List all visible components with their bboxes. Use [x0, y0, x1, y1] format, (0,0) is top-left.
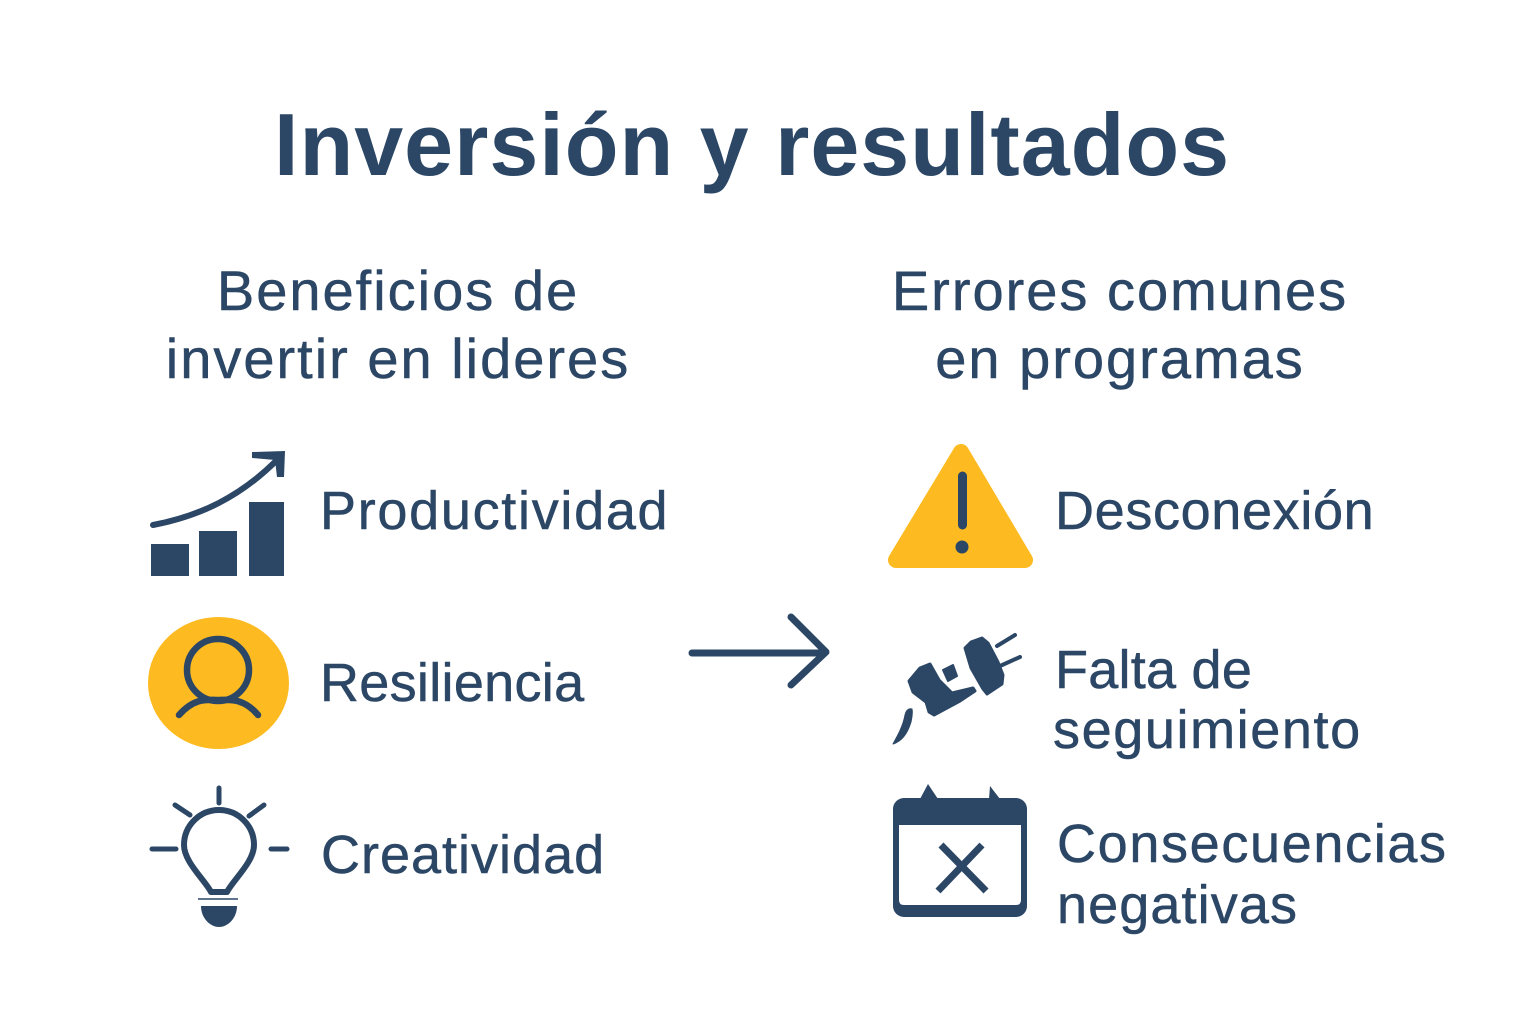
heading: errores: en programas — [935, 327, 1305, 390]
heading: errores: Errores comunes — [892, 259, 1348, 322]
icon: warning triangle — [896, 452, 1025, 560]
label: falta de seguimiento: seguimiento — [1053, 700, 1362, 760]
label: resiliencia: Resiliencia — [320, 653, 584, 713]
icon: person in yellow circle — [148, 617, 289, 749]
icon: light bulb — [152, 788, 287, 927]
label: consecuencias negativas — [1057, 814, 1448, 935]
label: consecuencias negativas: negativas — [1057, 875, 1298, 935]
label: consecuencias negativas: Consecuencias — [1057, 814, 1448, 874]
heading: beneficios — [166, 259, 630, 390]
title: Inversión y resultados — [274, 95, 1230, 194]
label: productividad: Productividad — [320, 481, 669, 541]
icon: growth chart — [151, 451, 285, 576]
arrow — [692, 617, 826, 685]
label: falta de seguimiento — [1053, 640, 1362, 760]
heading: beneficios: Beneficios de — [217, 259, 579, 322]
label: desconexion: Desconexión — [1055, 481, 1374, 541]
icon: unplugged plug — [893, 635, 1020, 744]
label: falta de seguimiento: Falta de — [1055, 640, 1252, 700]
heading: beneficios: invertir en lideres — [166, 327, 630, 390]
label: creatividad: Creatividad — [321, 825, 605, 885]
heading: errores — [892, 259, 1348, 390]
icon: calendar with X — [893, 784, 1027, 917]
